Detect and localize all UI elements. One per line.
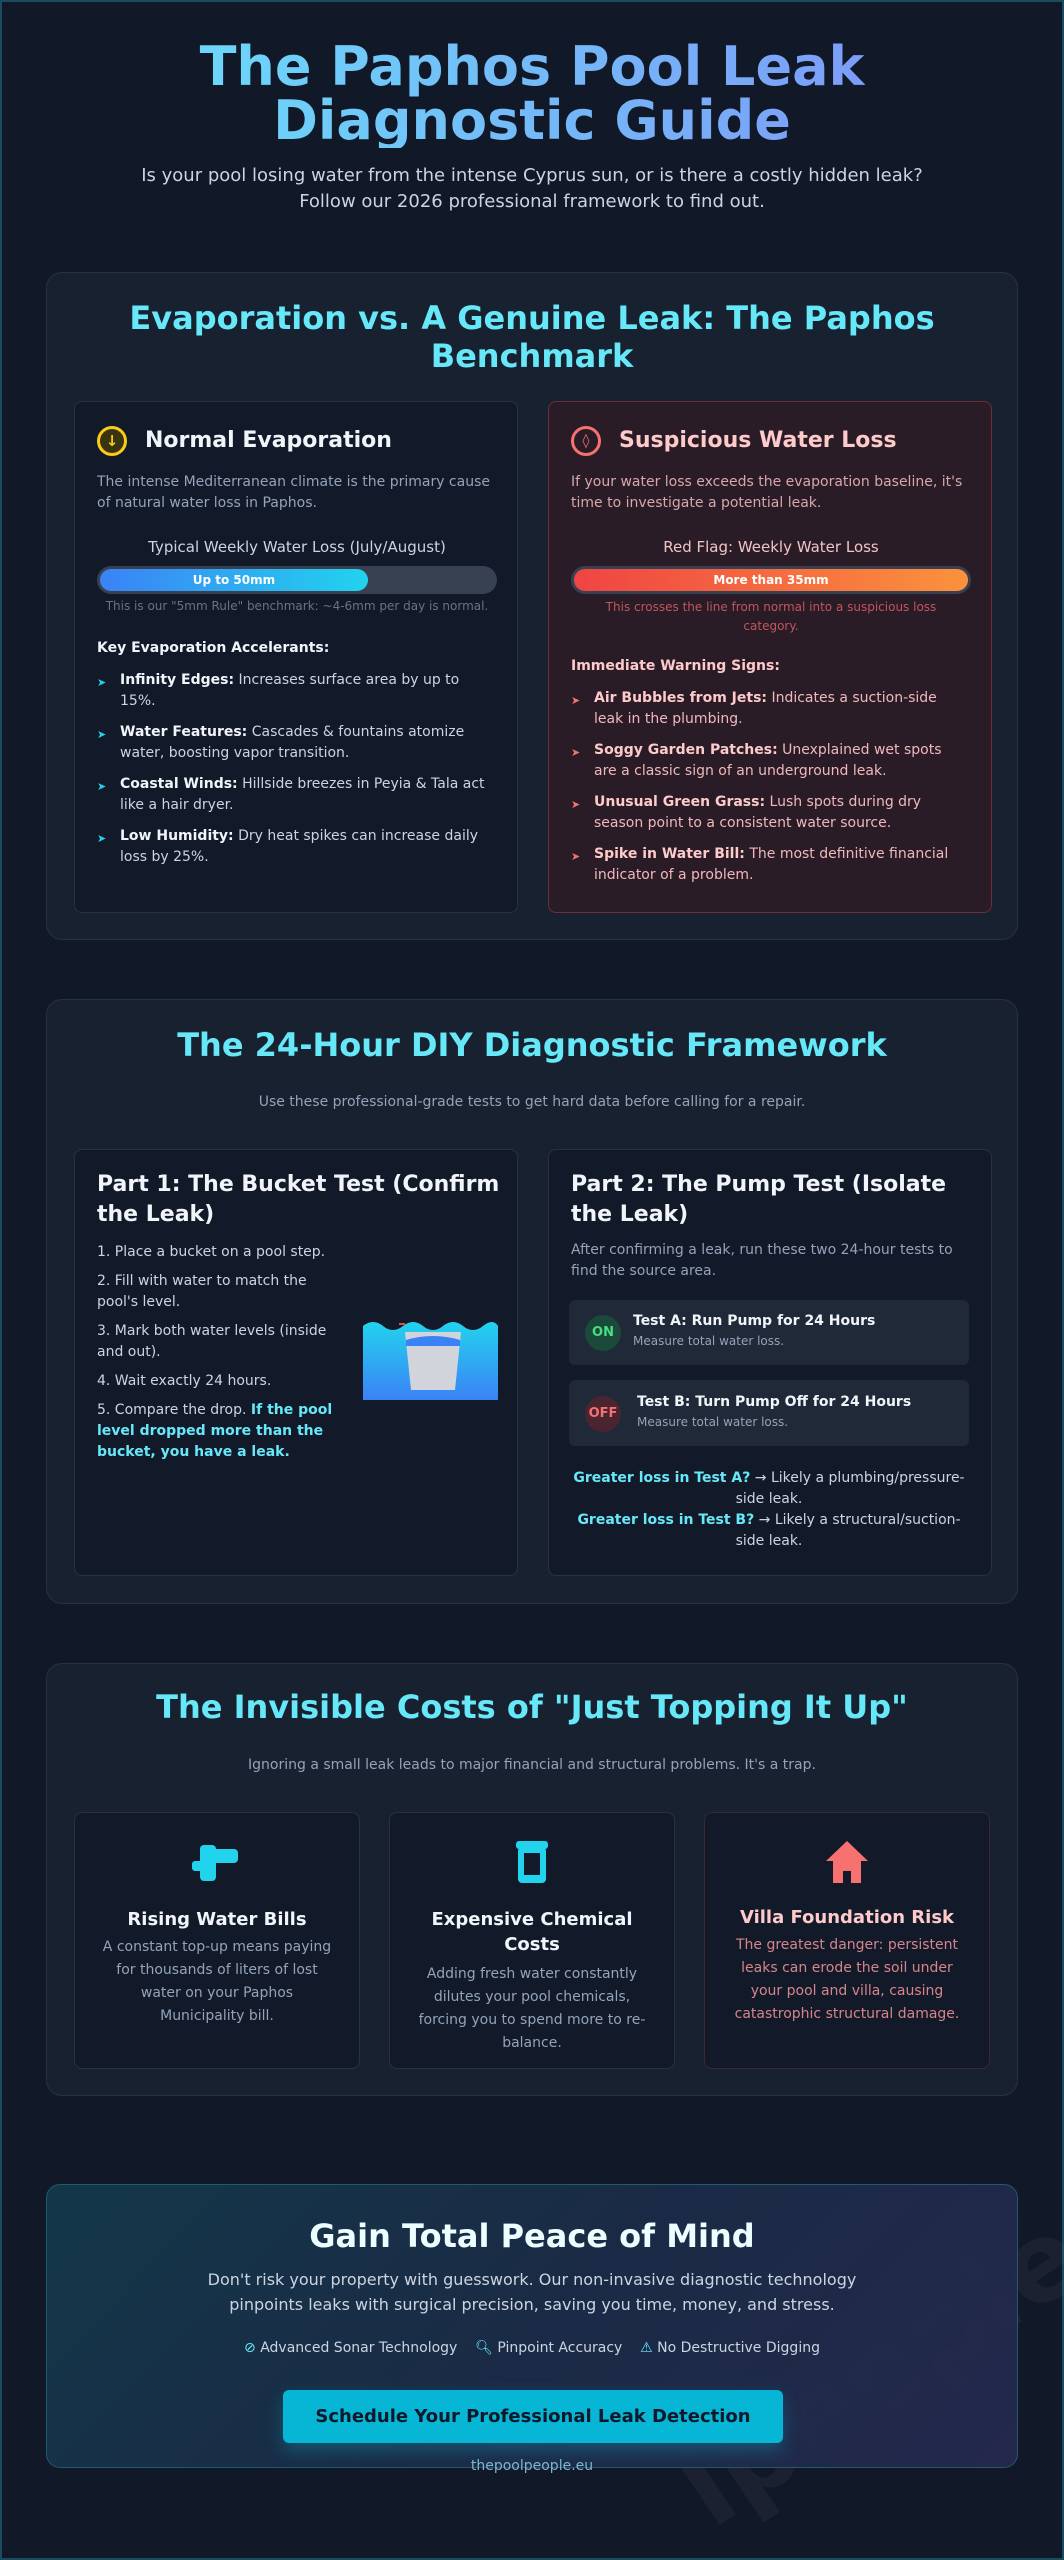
steps: 5. Compare the drop. If the pool level dropped more than the bucket, you have a leak. (97, 1402, 332, 1460)
subtitle: Use these professional-grade tests to get hard data before calling for a repair. (259, 1094, 805, 1110)
accelerants list: Water Features: Cascades & fountains atomize water, boosting vapor transition. (120, 724, 464, 761)
badge on (585, 1315, 621, 1351)
steps (97, 1244, 332, 1460)
icon: chemical bottle (516, 1841, 548, 1883)
bar chart: weekly loss: This is our "5mm Rule" benchmark: ~4-6mm per day is normal. (106, 599, 488, 613)
warning signs list (572, 690, 948, 883)
bar chart: red flag: More than 35mm (713, 573, 829, 587)
title: The Paphos Pool Leak (200, 35, 864, 98)
card title: Suspicious Water Loss (619, 428, 897, 453)
heading (129, 299, 935, 375)
test B: Test B: Turn Pump Off for 24 Hours (637, 1394, 911, 1410)
description (208, 2270, 856, 2314)
panel: call to action (46, 2184, 1018, 2468)
result text: Greater loss in Test B? → Likely a structural/suction-side leak. (577, 1512, 961, 1549)
card: water bills: Rising Water Bills (127, 1909, 307, 1930)
steps: 3. Mark both water levels (inside and out). (97, 1323, 326, 1360)
subtitle: Is your pool losing water from the intense Cyprus sun, or is there a costly hidden leak? (141, 165, 923, 186)
heading: The 24-Hour DIY Diagnostic Framework (177, 1026, 887, 1064)
bar chart: red flag (571, 538, 971, 633)
subtitle (141, 165, 923, 212)
card: foundation risk (704, 1812, 990, 2069)
description: The intense Mediterranean climate is the primary cause of natural water loss in Paphos. (97, 474, 490, 511)
title (0, 40, 1064, 148)
steps: 4. Wait exactly 24 hours. (97, 1373, 271, 1389)
card: pump test (548, 1149, 992, 1576)
icon: house (826, 1841, 868, 1883)
card: chemical costs: Adding fresh water constantly dilutes your pool chemicals, forcing you to spend more to re-balance. (419, 1966, 645, 2051)
test B: Measure total water loss. (637, 1415, 788, 1429)
warning signs heading: Immediate Warning Signs: (571, 658, 780, 674)
heading: The Invisible Costs of "Just Topping It Up" (156, 1688, 908, 1726)
icon: sun (97, 426, 127, 456)
icon: drop warning (571, 426, 601, 456)
bar chart: red flag: Red Flag: Weekly Water Loss (663, 538, 879, 556)
card: chemical costs: Expensive Chemical Costs (431, 1909, 633, 1955)
heading: Evaporation vs. A Genuine Leak: The Paphos (129, 299, 935, 337)
title: Diagnostic Guide (273, 89, 791, 152)
url: thepoolpeople.eu (471, 2458, 593, 2474)
bar chart: red flag: This crosses the line from normal into a suspicious loss category. (606, 600, 936, 633)
description: After confirming a leak, run these two 24-hour tests to find the source area. (571, 1242, 953, 1279)
part title: Part 2: The Pump Test (Isolate the Leak) (571, 1172, 946, 1227)
card: normal evaporation (74, 401, 518, 913)
description: Don't risk your property with guesswork. Our non-invasive diagnostic technology (208, 2270, 856, 2289)
description: pinpoints leaks with surgical precision, saving you time, money, and stress. (229, 2295, 835, 2314)
test B (569, 1380, 969, 1446)
button (283, 2390, 783, 2443)
test A: Measure total water loss. (633, 1334, 784, 1348)
steps: 2. Fill with water to match the pool's level. (97, 1273, 307, 1310)
accelerants list: Infinity Edges: Increases surface area by up to 15%. (120, 672, 459, 709)
badge off (585, 1396, 621, 1432)
icon: faucet (192, 1845, 238, 1881)
steps: 1. Place a bucket on a pool step. (97, 1244, 325, 1260)
warning signs list: Unusual Green Grass: Lush spots during dry season point to a consistent water source. (594, 794, 921, 831)
test A: Test A: Run Pump for 24 Hours (633, 1313, 875, 1329)
card: foundation risk: The greatest danger: persistent leaks can erode the soil under your pool and villa, causing catastrophic structural damage. (735, 1937, 959, 2022)
icon: sun: ↓ (106, 432, 118, 450)
description: If your water loss exceeds the evaporation baseline, it's time to investigate a potential leak. (571, 474, 962, 511)
card: chemical costs (389, 1812, 675, 2069)
badge off: OFF (589, 1406, 617, 1421)
panel: invisible costs (46, 1663, 1018, 2096)
accelerants list: Low Humidity: Dry heat spikes can increase daily loss by 25%. (120, 828, 478, 865)
feature list: ⊘ Advanced Sonar Technology 🔍︎ Pinpoint Accuracy ⚠︎ No Destructive Digging (244, 2340, 820, 2356)
card: bucket test (74, 1149, 518, 1576)
icon: bucket in pool (363, 1322, 498, 1400)
card: suspicious water loss (548, 401, 992, 913)
part title: Part 1: The Bucket Test (Confirm the Leak) (97, 1172, 499, 1227)
card title: Normal Evaporation (145, 428, 392, 453)
icon: drop warning: ◊ (583, 433, 589, 449)
subtitle: Ignoring a small leak leads to major financial and structural problems. It's a trap. (248, 1757, 816, 1773)
accelerants heading: Key Evaporation Accelerants: (97, 640, 329, 656)
bar chart: weekly loss: Up to 50mm (193, 573, 275, 587)
bar chart: weekly loss: Typical Weekly Water Loss (July/August) (148, 538, 446, 556)
card: water bills (74, 1812, 360, 2069)
card: water bills: A constant top-up means paying for thousands of liters of lost water on your Paphos (103, 1939, 331, 2001)
heading: Benchmark (431, 337, 633, 375)
result text (573, 1470, 965, 1549)
panel: evaporation vs leak (46, 272, 1018, 940)
button: Schedule Your Professional Leak Detection (315, 2406, 751, 2427)
subtitle: Follow our 2026 professional framework to find out. (299, 191, 765, 212)
warning signs list: Soggy Garden Patches: Unexplained wet spots are a classic sign of an underground leak. (594, 742, 942, 779)
accelerants list (98, 672, 485, 865)
card: water bills: Municipality bill. (160, 2008, 274, 2024)
card: foundation risk: Villa Foundation Risk (740, 1907, 954, 1928)
bar chart: weekly loss (97, 538, 497, 613)
warning signs list: Air Bubbles from Jets: Indicates a suction-side leak in the plumbing. (594, 690, 937, 727)
accelerants list: Coastal Winds: Hillside breezes in Peyia & Tala act like a hair dryer. (120, 776, 485, 813)
test A (569, 1300, 969, 1365)
result text: Greater loss in Test A? → Likely a plumbing/pressure-side leak. (573, 1470, 965, 1507)
panel: DIY framework (46, 999, 1018, 1604)
badge on: ON (592, 1325, 614, 1340)
warning signs list: Spike in Water Bill: The most definitive financial indicator of a problem. (594, 846, 948, 883)
heading: Gain Total Peace of Mind (309, 2217, 755, 2255)
